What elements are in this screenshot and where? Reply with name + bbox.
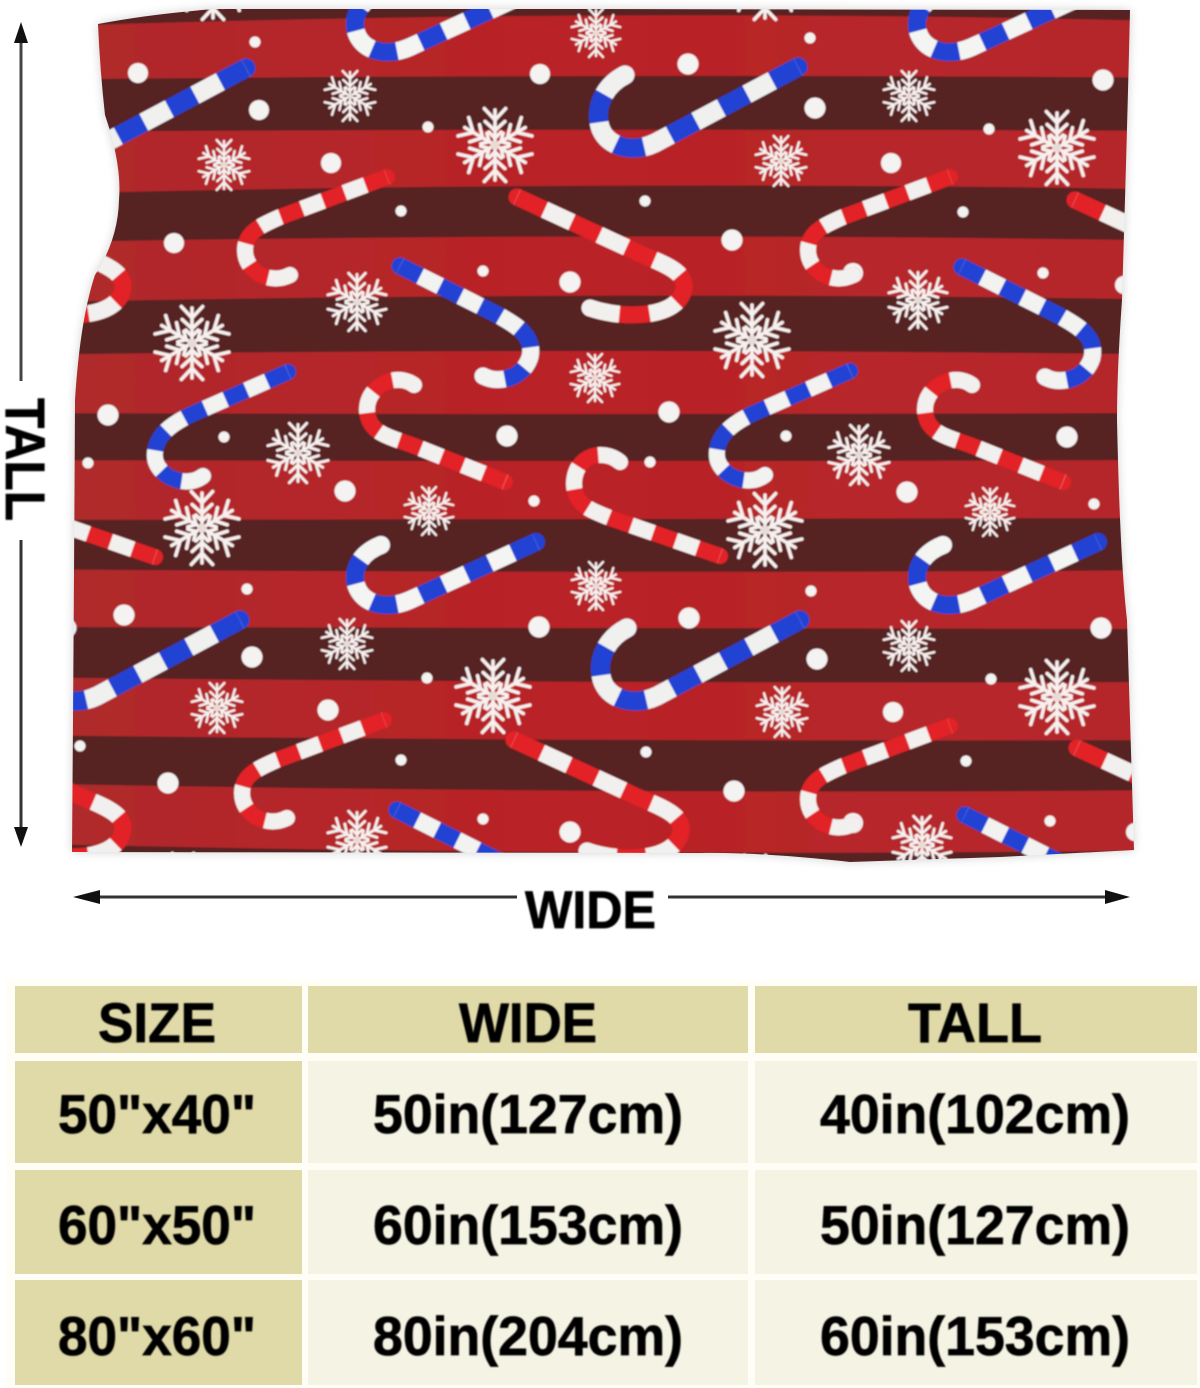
red candy cane left edge upper [84, 255, 132, 324]
row: 60x50 [15, 1170, 1197, 1274]
blue candy cane centre-left middle [355, 536, 536, 605]
red candy cane right edge upper [1065, 190, 1125, 234]
row: 60x50: 60in(153cm) [373, 1194, 683, 1256]
table background [6, 980, 1200, 1388]
header row: TALL [908, 991, 1042, 1054]
blue candy cane lower centre [600, 618, 800, 701]
arrow: tall lower [14, 540, 28, 847]
arrow: tall upper [14, 22, 28, 381]
arrow: wide right [668, 890, 1130, 904]
red candy cane centre [574, 454, 720, 556]
row: 50x40: 50"x40" [58, 1083, 256, 1145]
blue candy cane bottom right [955, 805, 1064, 856]
arrow: wide left [73, 890, 517, 904]
red candy cane left edge middle [74, 520, 164, 566]
row: 50x40: 50in(127cm) [373, 1083, 683, 1145]
header row: WIDE [459, 991, 597, 1054]
blue candy cane right middle [917, 536, 1098, 605]
row: 80x60 [15, 1280, 1197, 1385]
row: 60x50: 60"x50" [58, 1194, 256, 1256]
row: 50x40: 40in(102cm) [820, 1083, 1130, 1145]
row: 50x40 [15, 1061, 1197, 1163]
row: 80x60: 80in(204cm) [373, 1305, 683, 1367]
row: 60x50: 50in(127cm) [820, 1194, 1130, 1256]
red candy cane upper right [808, 177, 950, 283]
blue candy cane top left [109, 57, 257, 150]
red candy cane right middle [925, 377, 1063, 482]
label: WIDE: WIDE [525, 881, 656, 940]
blue candy cane top centre [598, 66, 798, 148]
blue candy cane bottom left [387, 800, 504, 853]
row: 80x60: 80"x60" [58, 1305, 256, 1367]
blue candy cane top right [917, 0, 1098, 52]
dark stripes [72, 9, 1132, 862]
snowflakes [146, 0, 1094, 928]
snow dots [74, 32, 1144, 842]
red candy cane right edge lower [1067, 739, 1132, 784]
red candy cane centre middle [367, 377, 505, 482]
blue candy cane left middle [155, 372, 288, 484]
size table [6, 980, 1200, 1388]
blue candy cane centre right middle [717, 371, 850, 483]
red candy cane left edge bottom [72, 782, 132, 852]
red candy cane upper centre [517, 197, 684, 316]
red candy cane bottom centre [514, 740, 681, 860]
panel: blanket with candy cane pattern [72, 9, 1134, 862]
header row: SIZE [98, 991, 216, 1054]
blanket shadow [72, 9, 1134, 862]
blue candy cane top centre-left [355, 0, 536, 52]
header row [15, 986, 1197, 1054]
row: 80x60: 60in(153cm) [820, 1305, 1130, 1367]
blue candy cane lower left [40, 618, 240, 701]
blue candy cane centre upper [400, 266, 531, 384]
red candy cane upper left [245, 177, 387, 283]
red candy cane lower left [242, 720, 384, 826]
red candy cane lower right [808, 726, 950, 832]
blanket red background [72, 14, 1134, 854]
blue candy cane right upper [962, 267, 1093, 386]
